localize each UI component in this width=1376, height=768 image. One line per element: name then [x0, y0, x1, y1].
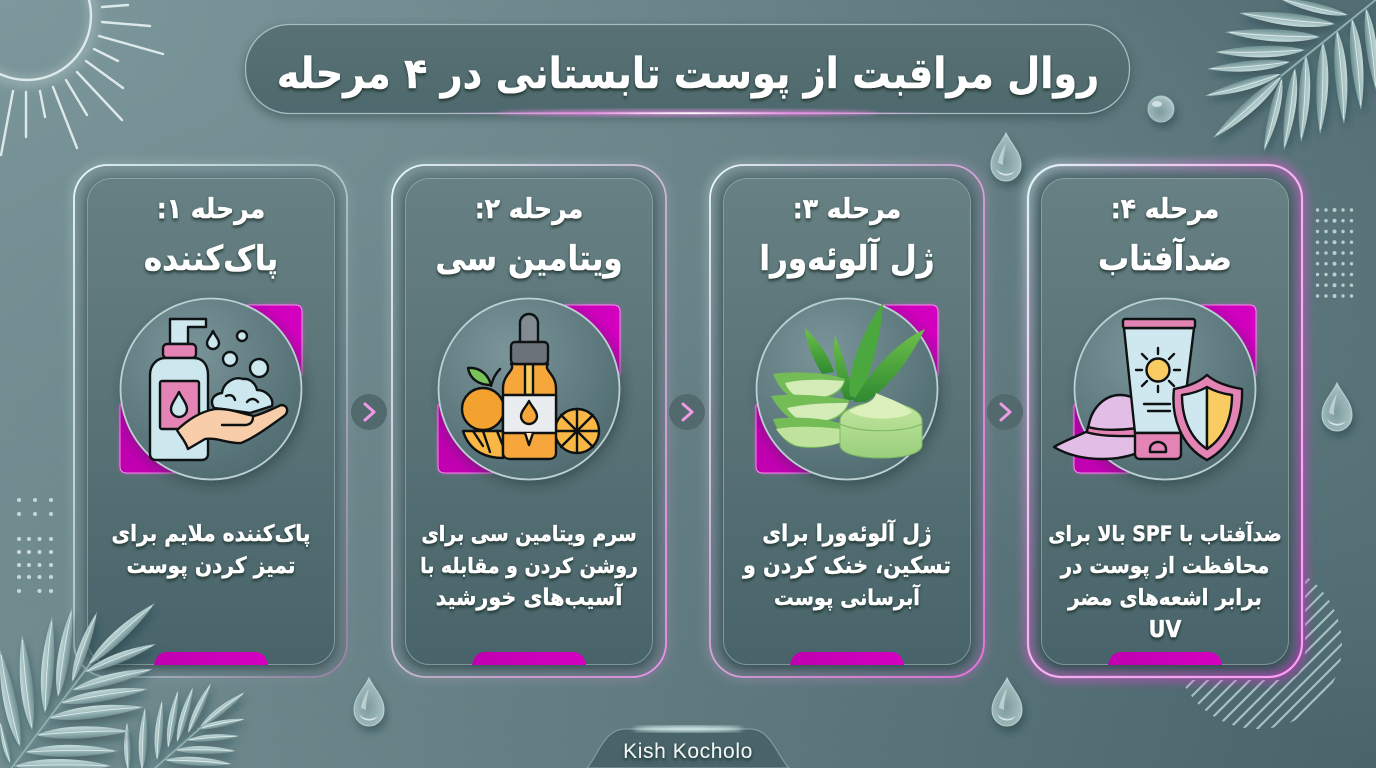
- step 1 heading: مرحله ۱:: [157, 193, 265, 225]
- step 3 description: [742, 519, 951, 610]
- step 1 description: تمیز کردن پوست: [127, 553, 295, 579]
- step 2 description: [420, 521, 638, 611]
- step 3 description: آبرسانی پوست: [774, 584, 921, 610]
- icon: serum bottle and oranges: [462, 314, 599, 459]
- water sphere: [1148, 96, 1174, 122]
- title banner: [245, 24, 1130, 118]
- step 4 description: برابر اشعه‌های مضر: [1067, 584, 1262, 610]
- panel: step 3 aloe vera: [710, 165, 984, 677]
- water drop: right: [1322, 383, 1352, 431]
- panel: step 2 vitamin C: [392, 165, 666, 677]
- palm leaf: top right: [1204, 0, 1376, 152]
- icon disc: [120, 298, 302, 480]
- magenta accent corners: [120, 305, 302, 473]
- icon disc: [1074, 298, 1256, 480]
- water drop: bottom left: [354, 678, 384, 726]
- panel: step 1 cleanser: [74, 165, 347, 677]
- bottom tab: [1108, 652, 1222, 665]
- magenta accent corners: [438, 305, 620, 473]
- title text: روال مراقبت از پوست تابستانی در ۴ مرحله: [277, 48, 1099, 99]
- palm leaf: bottom small: [124, 681, 247, 768]
- step 1 heading: [144, 193, 278, 278]
- water drop: bottom centre: [992, 678, 1022, 726]
- step 2 description: سرم ویتامین سی برای: [421, 521, 637, 546]
- step 3 description: تسکین، خنک کردن و: [742, 553, 951, 579]
- step 4 description: UV: [1149, 617, 1181, 643]
- footer tab: [587, 726, 789, 768]
- step 2 heading: [435, 193, 623, 279]
- arrow: step 1 to 2: [351, 394, 387, 430]
- step 1 description: پاک‌کننده ملایم برای: [112, 521, 310, 547]
- magenta accent corners: [756, 305, 938, 473]
- palm leaf: bottom large: [0, 598, 158, 768]
- magenta accent corners: [1074, 305, 1256, 473]
- step 4 heading: [1098, 193, 1232, 278]
- step 4 description: [1048, 520, 1282, 643]
- icon disc: [756, 298, 938, 480]
- step 4 description: ضدآفتاب با SPF بالا برای: [1048, 520, 1282, 546]
- icon: cleanser bottle and hand: [150, 319, 287, 460]
- step 1 heading: پاک‌کننده: [144, 238, 278, 278]
- step 1 description: [112, 521, 310, 579]
- sun line art: [0, 0, 163, 155]
- step 3 heading: [759, 193, 935, 279]
- step 3 heading: ژل آلوئه‌ورا: [759, 236, 935, 279]
- step 3 description: ژل آلوئه‌ورا برای: [762, 519, 932, 547]
- step 3 heading: مرحله ۳:: [793, 193, 901, 225]
- icon disc: [438, 298, 620, 480]
- icon: aloe vera and gel jar: [771, 303, 925, 458]
- step 4 description: محافظت از پوست در: [1060, 552, 1269, 578]
- bottom tab: [790, 652, 904, 665]
- water drop: top centre: [991, 133, 1021, 181]
- arrow: step 2 to 3: [669, 394, 705, 430]
- diagonal hatch circle: [1186, 578, 1342, 729]
- step 4 heading: ضدآفتاب: [1098, 236, 1232, 278]
- step 2 description: آسیب‌های خورشید: [436, 582, 623, 611]
- step 2 description: روشن کردن و مقابله با: [420, 553, 638, 578]
- dot grid: right: [1316, 208, 1353, 298]
- panel: step 4 sunscreen: [1028, 165, 1302, 677]
- step 4 heading: مرحله ۴:: [1111, 193, 1219, 225]
- step 2 heading: ویتامین سی: [435, 238, 623, 279]
- step 2 heading: مرحله ۲:: [475, 193, 583, 225]
- footer text: Kish Kocholo: [623, 740, 753, 763]
- dot grid: left: [17, 498, 53, 593]
- arrow: step 3 to 4: [987, 394, 1023, 430]
- icon: sunscreen, hat and shield: [1054, 319, 1242, 460]
- bottom tab: [154, 652, 268, 665]
- bottom tab: [472, 652, 586, 665]
